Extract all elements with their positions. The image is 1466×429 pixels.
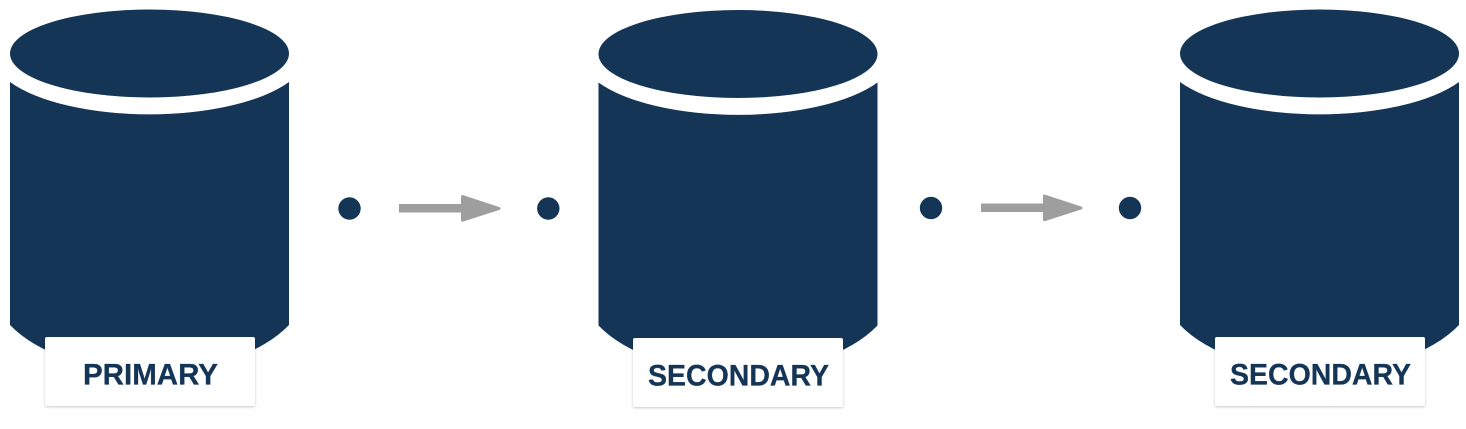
label: primary: PRIMARY xyxy=(83,358,218,392)
primary database cylinder xyxy=(10,10,289,372)
dot: right of second arrow xyxy=(1119,197,1141,219)
dot: left of first arrow xyxy=(338,197,361,220)
label: primary xyxy=(45,337,255,406)
arrow: primary to secondary xyxy=(399,196,499,220)
secondary database cylinder two xyxy=(1180,10,1459,372)
label: secondary one xyxy=(633,338,843,407)
label: secondary one: SECONDARY xyxy=(648,360,829,392)
dot: left of second arrow xyxy=(920,197,942,219)
arrow: secondary to secondary xyxy=(981,196,1081,220)
secondary database cylinder one xyxy=(598,10,878,372)
label: secondary two: SECONDARY xyxy=(1230,358,1411,392)
label: secondary two xyxy=(1215,337,1425,406)
dot: right of first arrow xyxy=(537,197,560,220)
